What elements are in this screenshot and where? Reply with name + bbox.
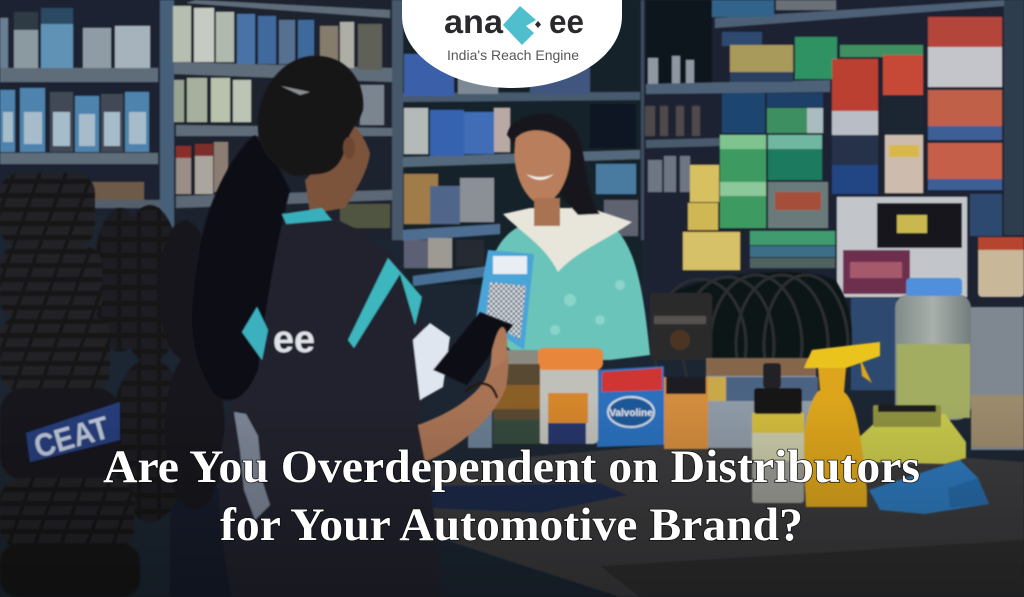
- blue microfiber cloth: [869, 460, 989, 514]
- glass jar: [493, 350, 540, 444]
- shirt: [219, 219, 444, 597]
- right glass jar of beans: [971, 237, 1024, 450]
- dark gradient behind title: [0, 400, 1024, 597]
- CEAT tyre band: CEAT: [30, 409, 113, 465]
- hair: [258, 56, 363, 176]
- blue product box: [594, 366, 664, 447]
- yellow polish applicator: [856, 405, 966, 464]
- left shelving unit: [0, 0, 174, 228]
- agent woman: [93, 56, 513, 597]
- logo wordmark: ana: [444, 3, 504, 40]
- products on counter: [468, 237, 1024, 514]
- title: Are You Overdependent on Distributors: [103, 441, 920, 493]
- tyre stack display: [650, 272, 852, 415]
- ponytail: [192, 135, 290, 400]
- middle-left shelving unit: [173, 0, 403, 240]
- right shelving unit with product boxes: [644, 0, 1024, 390]
- center shelving unit: [403, 0, 684, 286]
- shirt logo: [242, 307, 315, 361]
- title: [103, 441, 920, 551]
- ear: [343, 137, 355, 159]
- blue product box: Valvoline: [609, 408, 653, 419]
- shoulder stripe: [348, 258, 422, 348]
- QR code stand: [476, 250, 534, 350]
- logo mark: [503, 6, 536, 45]
- stacked tyres left: [0, 173, 140, 597]
- jar with orange lid: [537, 348, 603, 444]
- shopkeeper woman: [480, 114, 650, 360]
- bracelet: [465, 384, 497, 398]
- back box stack: [706, 358, 818, 448]
- fingers: [490, 327, 507, 370]
- small clear bottle: [752, 363, 804, 503]
- spray bottle: [803, 342, 880, 507]
- counter: [170, 440, 1024, 597]
- logo dot: [535, 21, 541, 28]
- orange box: [664, 377, 708, 449]
- stacked side tyres: [93, 205, 225, 522]
- neck and cheek: [305, 122, 370, 214]
- forearm: [418, 340, 508, 462]
- collar: [282, 208, 332, 224]
- shirt logo: ee: [273, 319, 315, 361]
- receipt: [413, 323, 450, 400]
- logo badge: ee: [549, 3, 584, 40]
- large green-filled jar: [895, 278, 971, 420]
- phone: [433, 312, 513, 385]
- title: for Your Automotive Brand?: [220, 499, 803, 551]
- logo badge: [402, 0, 622, 88]
- logo tagline: India's Reach Engine: [447, 47, 579, 63]
- hair clip: [281, 86, 310, 95]
- shirt map pattern: [234, 412, 270, 520]
